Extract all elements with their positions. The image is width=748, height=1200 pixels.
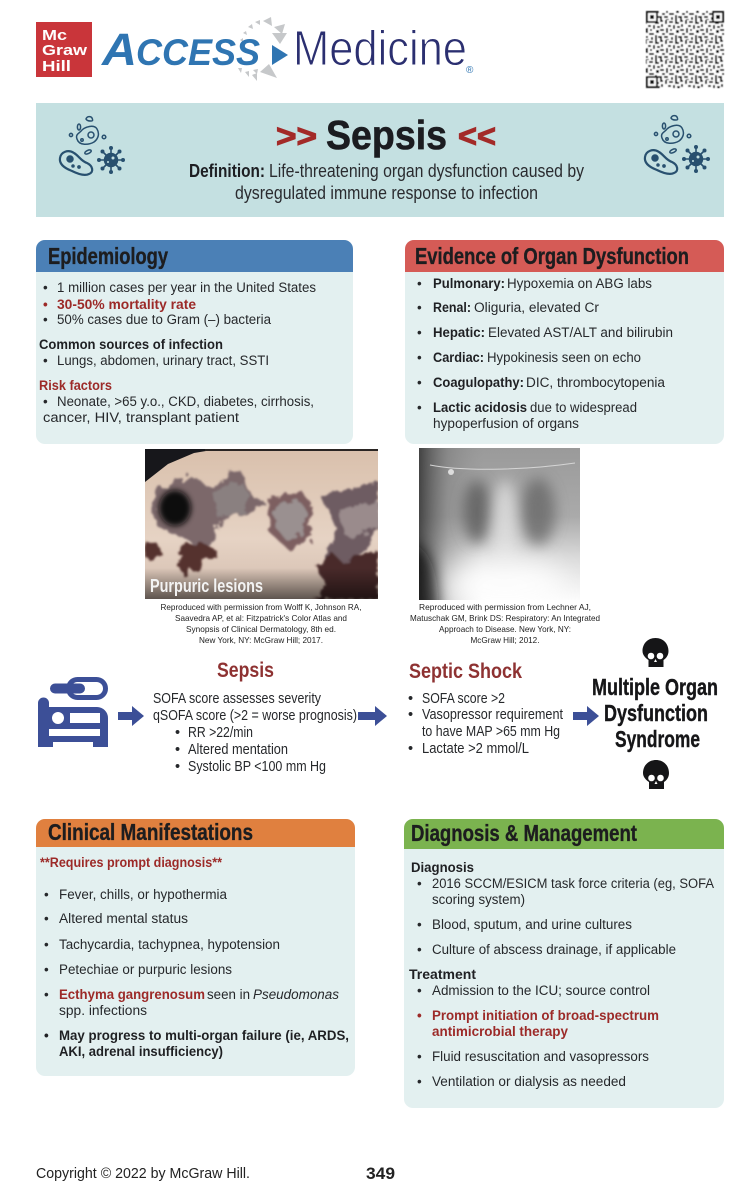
- treatment list: •: [417, 983, 422, 998]
- heading: evidence: Evidence of Organ Dysfunction: [415, 243, 689, 269]
- heading: diagnosis and management: Diagnosis & Management: [411, 820, 637, 846]
- icon: microbes right: [645, 116, 710, 174]
- treatment list: •: [417, 1074, 422, 1089]
- definition: Definition:: [189, 161, 265, 181]
- evidence list: Pulmonary:: [433, 276, 505, 291]
- treatment list: [409, 967, 659, 1089]
- diagnosis list: scoring system): [432, 892, 525, 907]
- evidence list: Coagulopathy:: [433, 375, 524, 390]
- logo: AccessMedicine: ®: [466, 65, 474, 76]
- icon: microbes left: [60, 117, 125, 175]
- caption: chest x-ray: Matuschak GM, Brink DS: Respiratory: An Integrated: [410, 613, 600, 623]
- copyright: Copyright © 2022 by McGraw Hill.: [36, 1166, 250, 1182]
- clinical manifestations list: Ecthyma gangrenosum: [59, 987, 205, 1002]
- multiple organ dysfunction syndrome: [592, 674, 718, 752]
- caption: chest x-ray: Approach to Disease. New York, NY:: [439, 624, 571, 634]
- clinical manifestations list: •: [44, 937, 49, 952]
- multiple organ dysfunction syndrome: Dysfunction: [604, 700, 708, 726]
- logo: McGraw Hill: Graw: [42, 42, 87, 59]
- epidemiology text: •: [43, 280, 48, 295]
- panel: epidemiology: [36, 240, 353, 444]
- epidemiology text: •: [43, 312, 48, 327]
- treatment list: Prompt initiation of broad-spectrum: [432, 1008, 659, 1023]
- evidence list: Renal:: [433, 300, 471, 315]
- panel: clinical manifestations: [36, 819, 355, 1076]
- icon: skull top: [642, 638, 668, 667]
- clinical manifestations list: Tachycardia, tachypnea, hypotension: [59, 937, 280, 952]
- evidence list: •: [417, 350, 422, 365]
- heading: clinical manifestations: Clinical Manifestations: [48, 819, 253, 845]
- evidence list: Lactic acidosis: [433, 400, 527, 415]
- clinical manifestations list: seen in: [207, 987, 250, 1002]
- epidemiology text: Risk factors: [39, 378, 112, 393]
- treatment list: Ventilation or dialysis as needed: [432, 1074, 626, 1089]
- evidence list: •: [417, 276, 422, 291]
- sepsis criteria: •: [175, 759, 180, 775]
- evidence list: Elevated AST/ALT and bilirubin: [488, 325, 673, 340]
- treatment list: •: [417, 1008, 422, 1023]
- arrow: to septic shock: [358, 706, 387, 726]
- epidemiology text: Lungs, abdomen, urinary tract, SSTI: [57, 353, 269, 368]
- epidemiology text: Neonate, >65 y.o., CKD, diabetes, cirrhosis,: [57, 394, 314, 409]
- icon: hospital bed: [38, 680, 108, 747]
- clinical manifestations list: •: [44, 887, 49, 902]
- clinical manifestations list: [40, 855, 349, 1059]
- epidemiology text: 30-50% mortality rate: [57, 297, 197, 312]
- diagnosis list: •: [417, 942, 422, 957]
- photo: chest x-ray: [419, 448, 580, 600]
- sepsis criteria: RR >22/min: [188, 725, 253, 741]
- logo: McGraw Hill: Mc: [42, 27, 67, 44]
- evidence list: •: [417, 300, 422, 315]
- treatment list: •: [417, 1049, 422, 1064]
- diagnosis list: 2016 SCCM/ESICM task force criteria (eg, SOFA: [432, 876, 714, 891]
- heading: Septic Shock: Septic Shock: [409, 660, 522, 683]
- panel: evidence of organ dysfunction: [405, 240, 724, 444]
- caption: purpuric lesions: Synopsis of Clinical Dermatology, 8th ed.: [186, 624, 336, 634]
- definition: dysregulated immune response to infection: [235, 183, 538, 203]
- clinical manifestations list: Petechiae or purpuric lesions: [59, 962, 232, 977]
- sepsis criteria: Systolic BP <100 mm Hg: [188, 759, 326, 775]
- logo: AccessMedicine: Medicine: [293, 22, 467, 76]
- evidence list: Cardiac:: [433, 350, 484, 365]
- evidence list: hypoperfusion of organs: [433, 416, 579, 431]
- sepsis criteria: •: [175, 742, 180, 758]
- evidence list: Oliguria, elevated Cr: [474, 300, 600, 315]
- arrow: to MODS: [573, 706, 599, 726]
- diagnosis list: Culture of abscess drainage, if applicable: [432, 942, 676, 957]
- caption: chest x-ray: McGraw Hill; 2012.: [470, 635, 540, 645]
- evidence list: due to widespread: [530, 400, 637, 415]
- heading: Sepsis: Sepsis: [326, 112, 447, 158]
- clinical manifestations list: AKI, adrenal insufficiency): [59, 1044, 223, 1059]
- evidence list: Hypokinesis seen on echo: [487, 350, 641, 365]
- epidemiology text: •: [43, 394, 48, 409]
- page number: 349: [366, 1164, 395, 1183]
- septic shock criteria: to have MAP >65 mm Hg: [422, 724, 560, 740]
- logo: AccessMedicine: CCESS: [136, 32, 260, 73]
- panel: diagnosis and management: [404, 819, 724, 1108]
- epidemiology text: Common sources of infection: [39, 337, 223, 352]
- sepsis criteria: [153, 691, 357, 775]
- treatment list: Treatment: [409, 967, 477, 982]
- heading: epidemiology: Epidemiology: [48, 243, 168, 269]
- diagnosis list: Diagnosis: [411, 860, 474, 875]
- epidemiology text: cancer, HIV, transplant patient: [43, 410, 239, 425]
- evidence list: •: [417, 375, 422, 390]
- evidence list: [417, 276, 673, 431]
- treatment list: antimicrobial therapy: [432, 1024, 568, 1039]
- epidemiology text: [39, 280, 316, 425]
- evidence list: •: [417, 325, 422, 340]
- logo: McGraw Hill: [36, 22, 92, 77]
- caption: purpuric lesions: New York, NY: McGraw Hill; 2017.: [199, 635, 323, 645]
- heading: Sepsis: <<: [458, 118, 496, 154]
- clinical manifestations list: Pseudomonas: [253, 987, 339, 1002]
- diagnosis list: •: [417, 917, 422, 932]
- diagnosis list: [411, 860, 714, 957]
- caption: chest x-ray: [410, 602, 600, 645]
- logo: McGraw Hill: Hill: [42, 58, 71, 75]
- treatment list: Fluid resuscitation and vasopressors: [432, 1049, 649, 1064]
- caption: chest x-ray: Reproduced with permission from Lechner AJ,: [419, 602, 591, 612]
- evidence list: Hypoxemia on ABG labs: [507, 276, 652, 291]
- evidence list: Hepatic:: [433, 325, 485, 340]
- QR code: [646, 11, 724, 88]
- icon: skull bottom: [643, 760, 669, 789]
- heading: Sepsis stage: Sepsis: [217, 659, 274, 682]
- sepsis criteria: •: [175, 725, 180, 741]
- clinical manifestations list: •: [44, 1028, 49, 1043]
- sepsis criteria: qSOFA score (>2 = worse prognosis): [153, 708, 357, 724]
- evidence list: •: [417, 400, 422, 415]
- photo label: Purpuric lesions: [150, 576, 263, 596]
- epidemiology text: •: [43, 297, 48, 312]
- treatment list: Admission to the ICU; source control: [432, 983, 650, 998]
- epidemiology text: 50% cases due to Gram (–) bacteria: [57, 312, 271, 327]
- septic shock criteria: Vasopressor requirement: [422, 707, 563, 723]
- logo: AccessMedicine: A: [101, 24, 137, 75]
- septic shock criteria: •: [408, 691, 413, 707]
- diagnosis list: Blood, sputum, and urine cultures: [432, 917, 632, 932]
- septic shock criteria: SOFA score >2: [422, 691, 505, 707]
- definition: [189, 161, 584, 203]
- sepsis criteria: Altered mentation: [188, 742, 288, 758]
- clinical manifestations list: Altered mental status: [59, 911, 188, 926]
- clinical manifestations list: •: [44, 962, 49, 977]
- evidence list: DIC, thrombocytopenia: [526, 375, 665, 390]
- clinical manifestations list: •: [44, 987, 49, 1002]
- caption: purpuric lesions: Reproduced with permission from Wolff K, Johnson RA,: [160, 602, 362, 612]
- heading: Sepsis: >>: [276, 118, 317, 154]
- clinical manifestations list: May progress to multi-organ failure (ie, ARDS,: [59, 1028, 349, 1043]
- diagnosis list: •: [417, 876, 422, 891]
- logo: AccessMedicine: [101, 17, 474, 81]
- septic shock criteria: Lactate >2 mmol/L: [422, 741, 529, 757]
- clinical manifestations list: spp. infections: [59, 1003, 147, 1018]
- septic shock criteria: •: [408, 741, 413, 757]
- caption: purpuric lesions: Saavedra AP, et al: Fitzpatrick's Color Atlas and: [175, 613, 347, 623]
- epidemiology text: •: [43, 353, 48, 368]
- epidemiology text: 1 million cases per year in the United States: [57, 280, 316, 295]
- clinical manifestations list: •: [44, 911, 49, 926]
- photo: purpuric lesions: [145, 449, 378, 599]
- arrow: to sepsis: [118, 706, 144, 726]
- septic shock criteria: [408, 691, 563, 757]
- multiple organ dysfunction syndrome: Syndrome: [615, 726, 700, 752]
- clinical manifestations list: Fever, chills, or hypothermia: [59, 887, 227, 902]
- title banner: [36, 103, 724, 217]
- definition: Life-threatening organ dysfunction caused by: [269, 161, 584, 181]
- heading: Sepsis: [276, 112, 496, 158]
- clinical manifestations list: **Requires prompt diagnosis**: [40, 855, 223, 870]
- caption: purpuric lesions: [160, 602, 362, 645]
- septic shock criteria: •: [408, 707, 413, 723]
- sepsis criteria: SOFA score assesses severity: [153, 691, 322, 707]
